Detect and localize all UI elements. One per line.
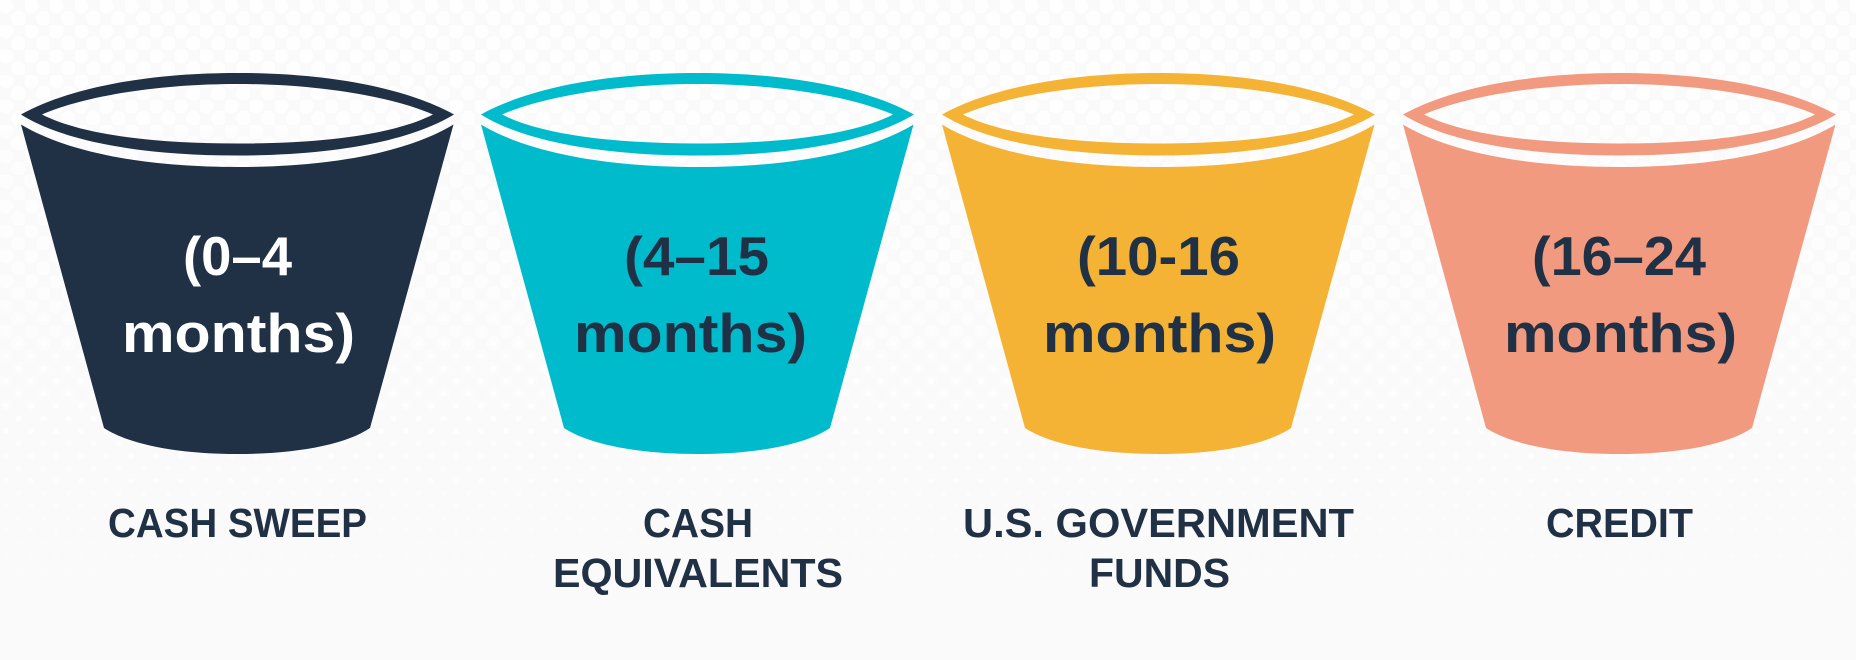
icon: salmon bucket (1403, 73, 1836, 454)
range: 10-16 months: (10-16 (1077, 225, 1240, 287)
range: 4–15 months: (4–15 (624, 225, 769, 287)
label: credit: CREDIT (1546, 500, 1693, 546)
range: 4–15 months: months) (574, 302, 807, 364)
range: 16–24 months: (16–24 (1532, 225, 1706, 287)
label: U.S. government funds: FUNDS (1089, 550, 1230, 596)
range: 16–24 months (1504, 225, 1737, 364)
panel: cash sweep bucket (21, 73, 454, 546)
panel: cash equivalents bucket (481, 73, 914, 596)
label: cash sweep: CASH SWEEP (108, 500, 367, 546)
label: cash equivalents (553, 500, 843, 596)
icon: navy bucket (21, 73, 454, 454)
label: cash equivalents: CASH (643, 500, 753, 546)
range: 10-16 months (1043, 225, 1276, 364)
range: 10-16 months: months) (1043, 302, 1276, 364)
label: U.S. government funds: U.S. GOVERNMENT (963, 500, 1354, 546)
icon: teal bucket (481, 73, 914, 454)
range: 0–4 months (122, 225, 355, 364)
label: cash equivalents: EQUIVALENTS (553, 550, 843, 596)
panel: credit bucket (1403, 73, 1836, 546)
panel: U.S. government funds bucket (942, 73, 1375, 596)
range: 0–4 months: (0–4 (183, 225, 292, 287)
range: 0–4 months: months) (122, 302, 355, 364)
icon: yellow bucket (942, 73, 1375, 454)
range: 4–15 months (574, 225, 807, 364)
range: 16–24 months: months) (1504, 302, 1737, 364)
label: U.S. government funds (963, 500, 1354, 596)
